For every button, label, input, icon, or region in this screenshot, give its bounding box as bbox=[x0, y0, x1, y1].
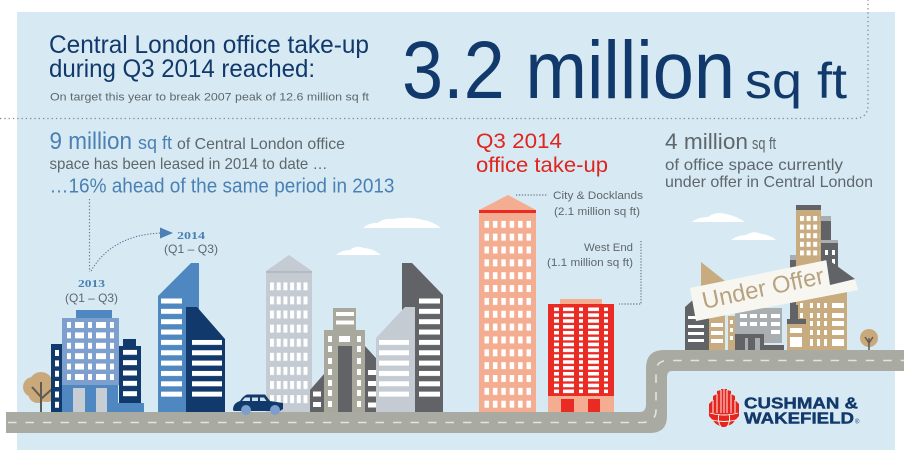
heading: Q3 2014 office take-up bbox=[476, 130, 608, 177]
label: 2013: (Q1 – Q3) bbox=[65, 291, 118, 305]
text block: 9 million: sq ft bbox=[138, 133, 172, 153]
label: City & Docklands bbox=[516, 190, 644, 218]
headline figure: 3.2 million bbox=[402, 25, 735, 116]
label: West End bbox=[547, 241, 641, 304]
heading: Q3 2014 office take-up: Q3 2014 bbox=[476, 130, 562, 153]
banner: under offer bbox=[690, 258, 858, 321]
title: during Q3 2014 reached: bbox=[49, 55, 315, 83]
tree: right bbox=[860, 329, 878, 350]
dotted connector and arrow bbox=[90, 199, 173, 272]
text block: 9 million: 9 million bbox=[50, 128, 132, 155]
dotted header divider bbox=[0, 0, 868, 118]
heading: Q3 2014 office take-up: office take-up bbox=[476, 154, 608, 177]
label: 2013 bbox=[65, 278, 118, 305]
under offer buildings bbox=[685, 205, 847, 350]
title bbox=[49, 31, 369, 83]
building: City & Docklands bbox=[479, 195, 536, 412]
text block: 9 million: of Central London office bbox=[177, 136, 345, 153]
label: City & Docklands: City & Docklands bbox=[553, 190, 644, 202]
icon: taxi bbox=[233, 394, 283, 415]
tree: left bbox=[23, 372, 57, 412]
label: 2013: 2013 bbox=[78, 278, 106, 290]
subtitle: On target this year to break 2007 peak of 12.6 million sq ft bbox=[50, 92, 369, 104]
text block: 4 million under offer: sq ft bbox=[752, 134, 776, 153]
label: 2014 bbox=[164, 230, 218, 256]
text block: 4 million under offer: under offer in Central London bbox=[665, 174, 873, 191]
building: grey mid-rise bbox=[310, 308, 384, 412]
building: 2013 bbox=[51, 310, 144, 412]
text block: 4 million under offer: 4 million bbox=[665, 129, 748, 154]
label: 2014: (Q1 – Q3) bbox=[164, 242, 218, 256]
text block: 9 million bbox=[50, 128, 394, 198]
text block: 9 million: space has been leased in 2014 to date … bbox=[50, 156, 328, 173]
text block: 9 million: …16% ahead of the same period in 2013 bbox=[50, 176, 394, 198]
road bbox=[6, 350, 904, 433]
title: Central London office take-up bbox=[49, 31, 369, 59]
label: City & Docklands: (2.1 million sq ft) bbox=[554, 206, 640, 218]
logo: Cushman & Wakefield: ® bbox=[855, 418, 860, 426]
logo: Cushman & Wakefield: CUSHMAN & bbox=[744, 396, 858, 412]
building: grey twin towers bbox=[376, 263, 443, 412]
banner: under offer: Under Offer bbox=[700, 263, 827, 315]
label: West End: (1.1 million sq ft) bbox=[547, 257, 633, 269]
logo: Cushman & Wakefield: WAKEFIELD bbox=[744, 410, 854, 428]
text block: 4 million under offer: of office space currently bbox=[665, 157, 843, 174]
building: West End bbox=[548, 299, 614, 412]
building: grey tower bbox=[266, 255, 312, 412]
text block: 4 million under offer bbox=[665, 129, 873, 191]
logo: Cushman & Wakefield bbox=[709, 389, 860, 428]
clouds bbox=[336, 213, 776, 255]
headline figure: sq ft bbox=[745, 53, 847, 109]
label: 2014: 2014 bbox=[177, 230, 206, 242]
building: 2014 bbox=[158, 263, 225, 412]
label: West End: West End bbox=[584, 242, 633, 254]
